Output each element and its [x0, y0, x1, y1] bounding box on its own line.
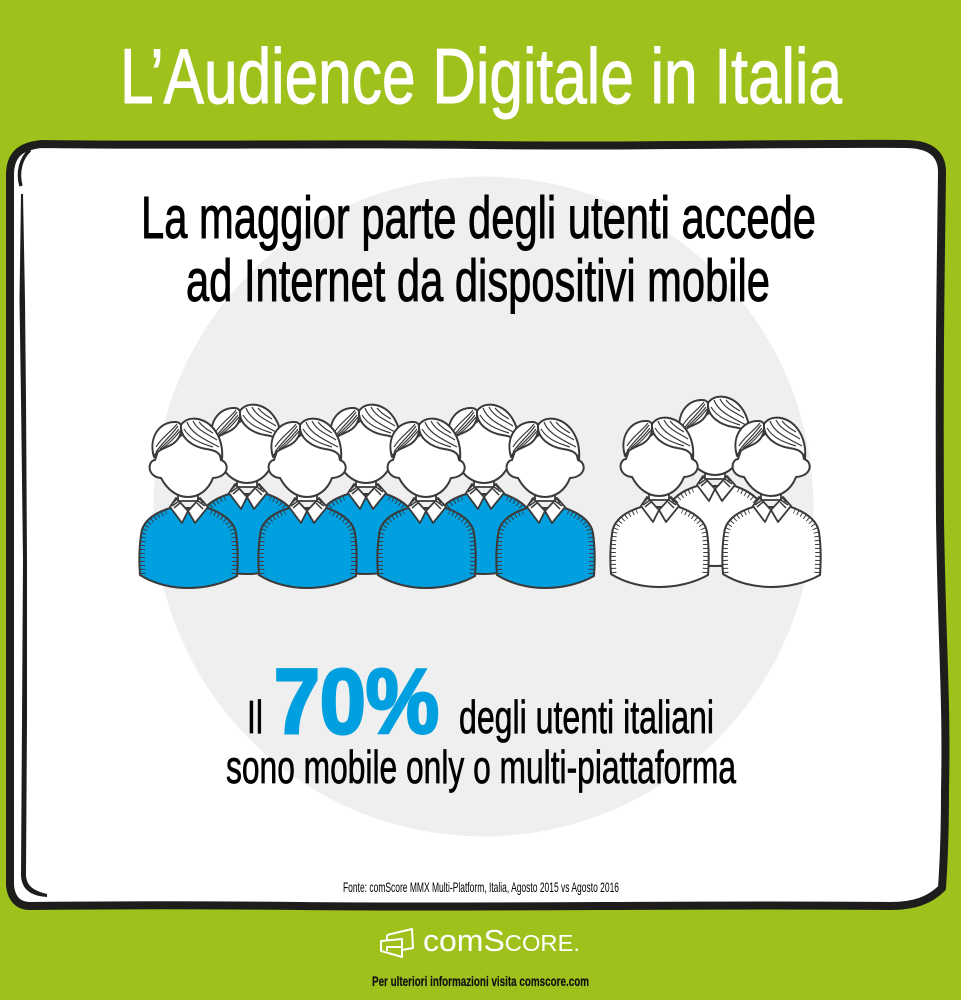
panel: sketched white frame	[10, 144, 945, 907]
statistic text	[226, 651, 736, 793]
footer link text: Per ulteriori informazioni visita comscore.com	[372, 973, 589, 989]
comScore wordmark: comSCORE.	[423, 923, 580, 958]
statistic text: sono mobile only o multi-piattaforma	[226, 741, 736, 793]
70% figure: 70%	[274, 651, 439, 753]
heading	[141, 185, 816, 314]
icon: comScore logo mark	[381, 929, 413, 957]
icon: three white people	[610, 397, 821, 587]
statistic text: degli utenti italiani	[459, 691, 714, 743]
source note: Fonte: comScore MMX Multi-Platform, Italia, Agosto 2015 vs Agosto 2016	[343, 879, 619, 895]
grey background circle	[154, 176, 814, 836]
statistic text: Il	[247, 691, 263, 743]
icon: seven blue people	[139, 405, 595, 588]
